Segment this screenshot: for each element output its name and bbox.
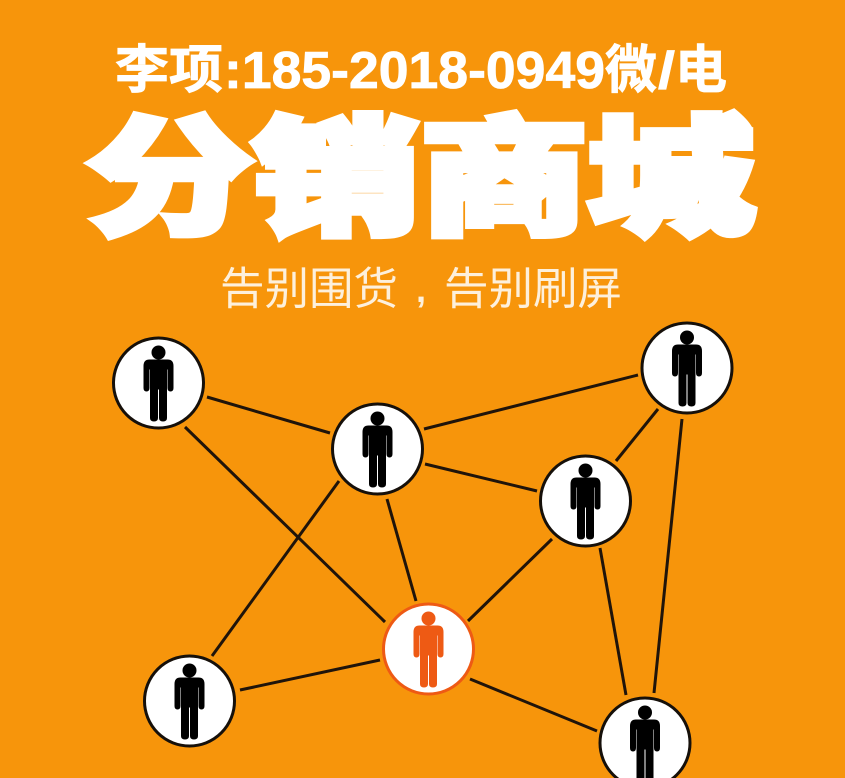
contact line: / [658, 42, 675, 100]
contact line: :185-2018-0949 [224, 42, 605, 100]
contact line: 微 [605, 42, 657, 100]
title [86, 75, 755, 262]
node: highlighted orange person [384, 604, 474, 694]
subtitle: 告别刷屏 [444, 252, 622, 317]
contact line [115, 42, 727, 100]
contact line: 电 [675, 42, 727, 100]
node: top left person [114, 338, 204, 428]
subtitle: , [416, 269, 426, 310]
node: top right person [642, 323, 732, 413]
subtitle: 告别围货 [220, 252, 398, 317]
title: 销 [252, 75, 420, 262]
subtitle [220, 252, 622, 317]
title: 分 [86, 75, 254, 262]
node: center person [332, 404, 422, 494]
node: right middle person [540, 456, 630, 546]
node: bottom left person [144, 656, 234, 746]
title: 商 [420, 75, 588, 262]
node: bottom right person [600, 698, 690, 778]
title: 城 [587, 75, 755, 262]
contact line: 李项 [115, 42, 223, 100]
network connecting lines [185, 375, 682, 731]
